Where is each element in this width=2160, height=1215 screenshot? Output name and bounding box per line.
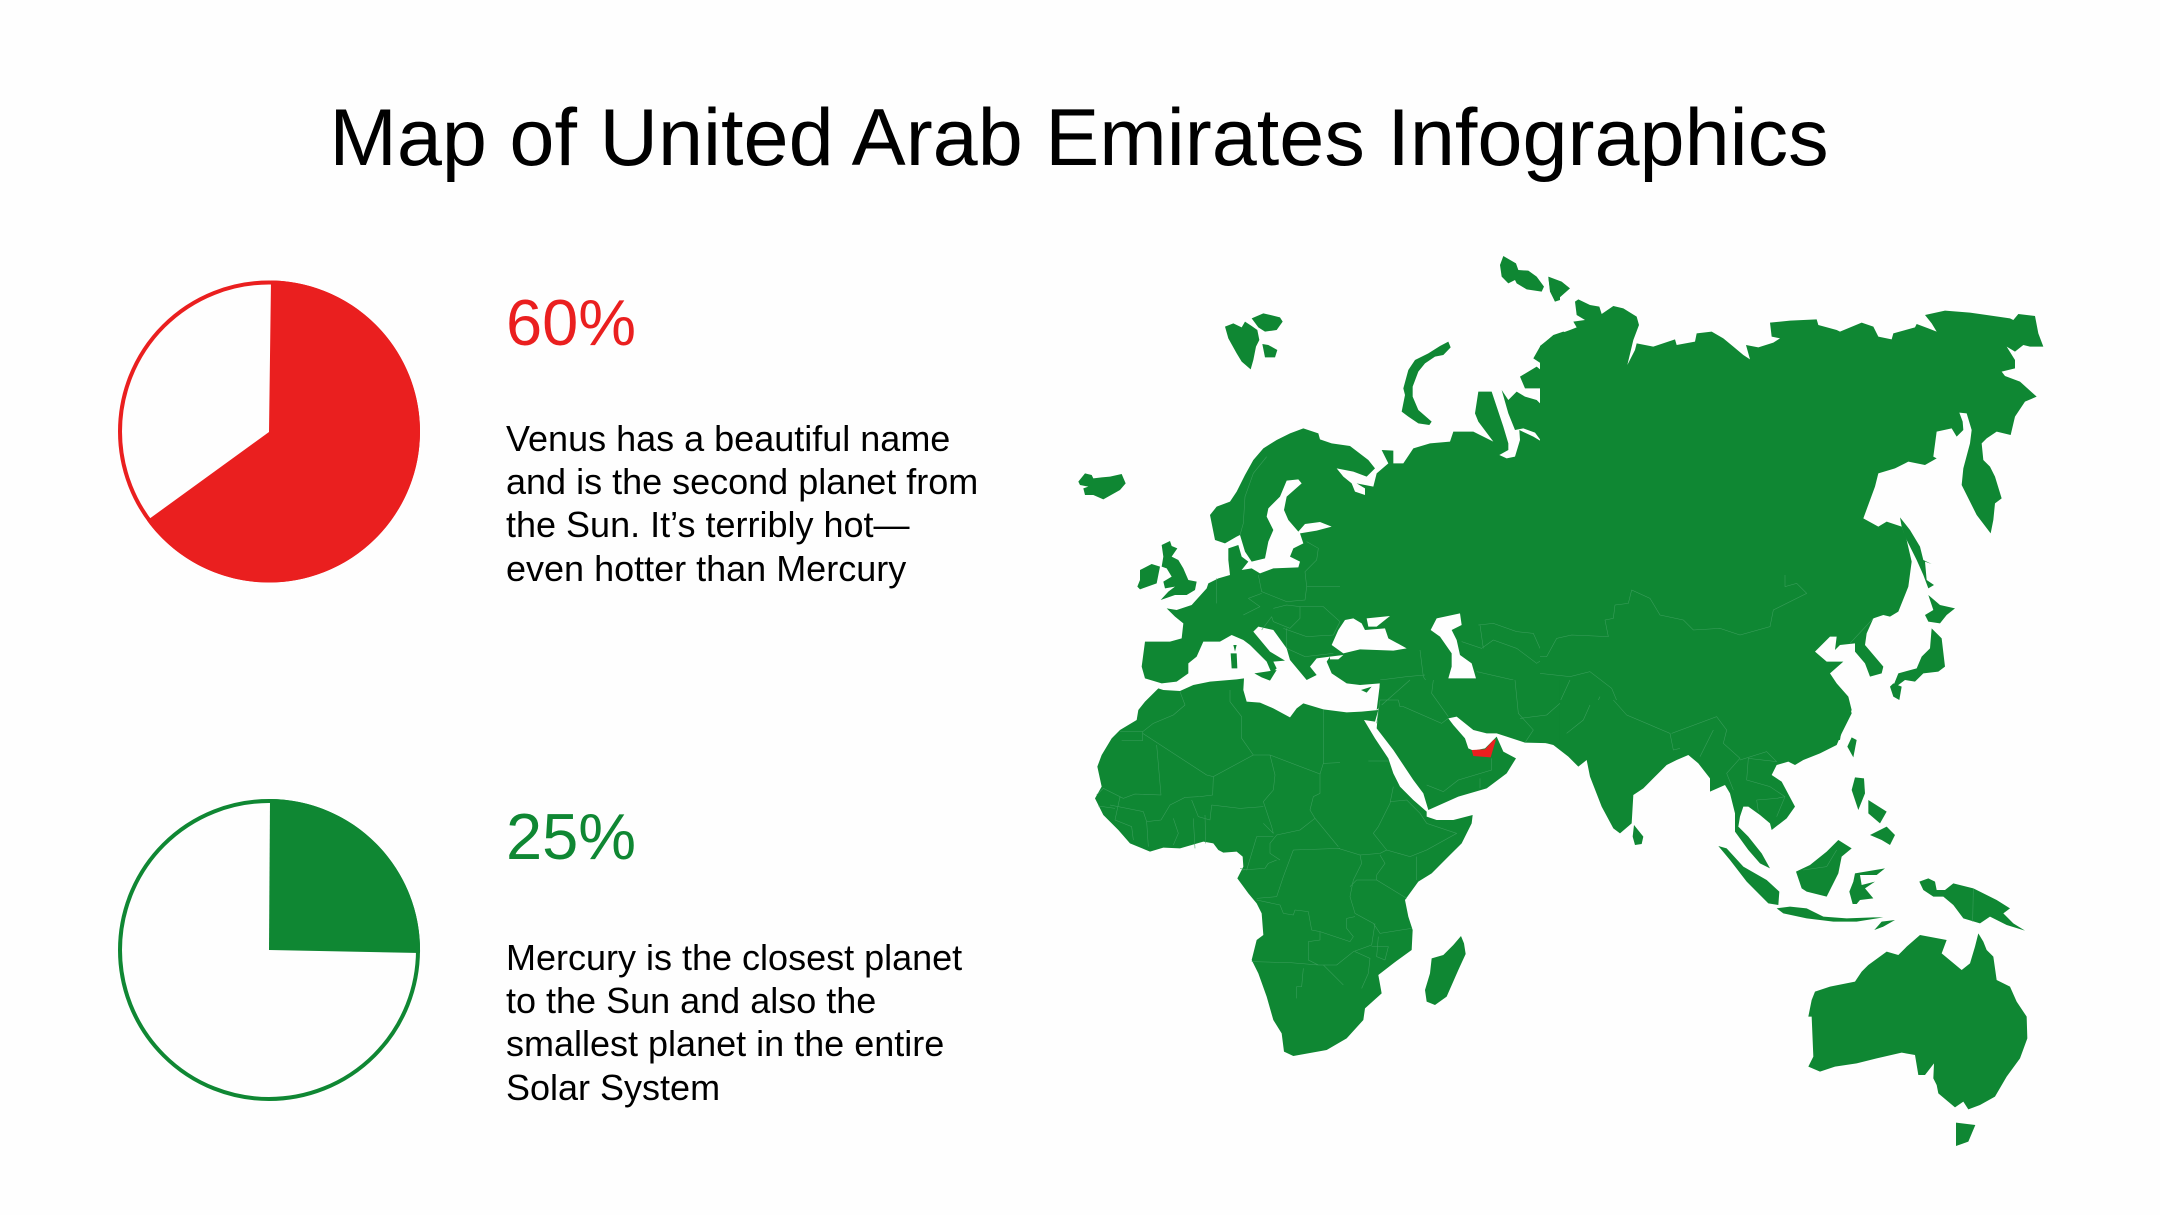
text block: Venus: Venus has a beautiful name <box>506 418 950 459</box>
pie chart: 25% green <box>120 799 420 1099</box>
text block: Venus <box>506 418 978 589</box>
stat value: 25%: 25% <box>506 800 636 873</box>
text block: Mercury: smallest planet in the entire <box>506 1023 944 1064</box>
pie chart: 60% red <box>120 280 420 582</box>
text block: Mercury <box>506 937 962 1108</box>
map region: South and Southeast Asia, Australia <box>1540 700 2027 1146</box>
map region: Siberia, China and Japan <box>1540 277 2043 740</box>
stat value: 60%: 60% <box>506 286 636 359</box>
map region: Africa, Arabia and UAE <box>1095 678 1560 1056</box>
text block: Venus: and is the second planet from <box>506 461 978 502</box>
text block: Venus: even hotter than Mercury <box>506 548 906 589</box>
map region: Europe and western Russia <box>1078 256 1593 710</box>
text block: Mercury: to the Sun and also the <box>506 980 876 1021</box>
text block: Venus: the Sun. It’s terribly hot— <box>506 504 910 545</box>
text block: Mercury: Mercury is the closest planet <box>506 937 962 978</box>
title: Map of United Arab Emirates Infographics <box>329 93 1829 183</box>
highlighted country: United Arab Emirates <box>1472 739 1496 757</box>
text block: Mercury: Solar System <box>506 1067 720 1108</box>
world map: Eurasia, Africa, Australia <box>1078 256 2043 1146</box>
